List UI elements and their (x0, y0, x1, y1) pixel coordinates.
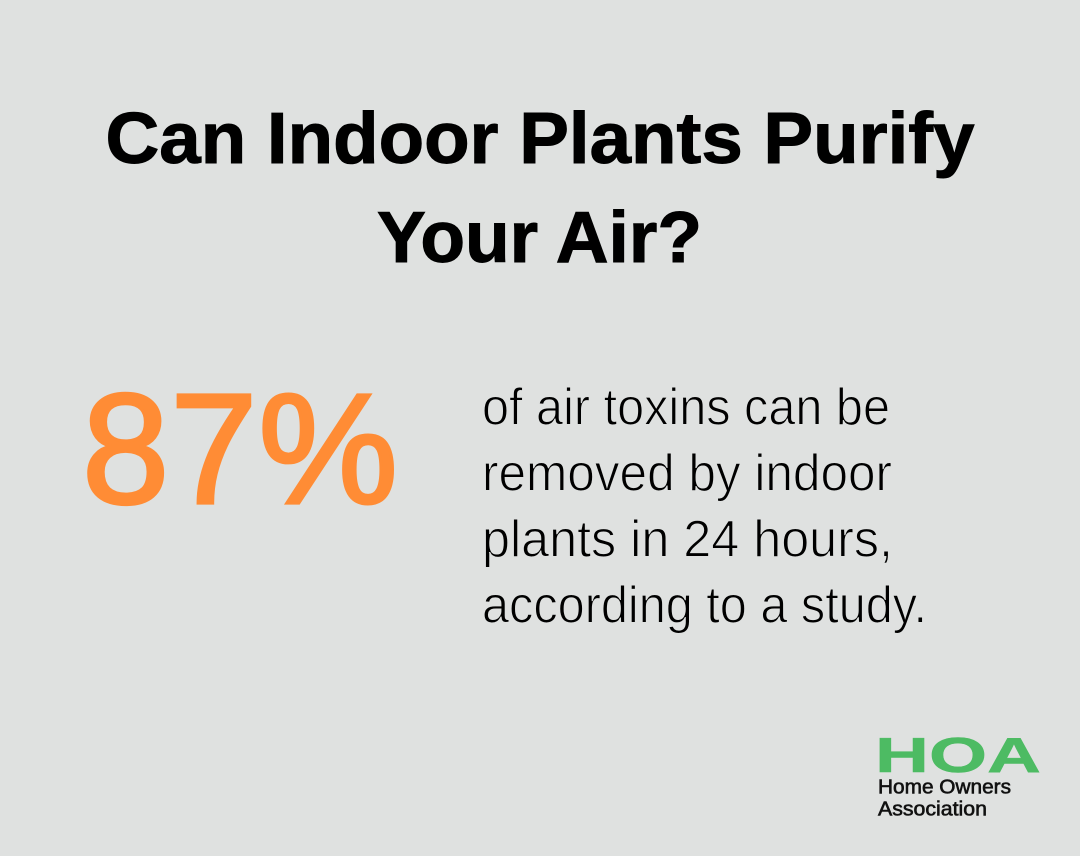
description text: removed by indoor (482, 444, 892, 502)
description text (482, 378, 927, 634)
logo name: Association (878, 798, 987, 820)
description text: of air toxins can be (482, 378, 890, 436)
title: Can Indoor Plants Purify (106, 99, 974, 179)
logo wordmark: HOA (875, 729, 1041, 783)
description text: plants in 24 hours, (482, 510, 893, 568)
title: Your Air? (377, 198, 702, 278)
title (106, 99, 974, 278)
logo name: Home Owners (878, 776, 1011, 798)
logo: HOA Home Owners Association (875, 729, 1041, 820)
description text: according to a study. (482, 576, 927, 634)
statistic: 87%: 87% (82, 362, 398, 537)
logo name (878, 776, 1011, 820)
